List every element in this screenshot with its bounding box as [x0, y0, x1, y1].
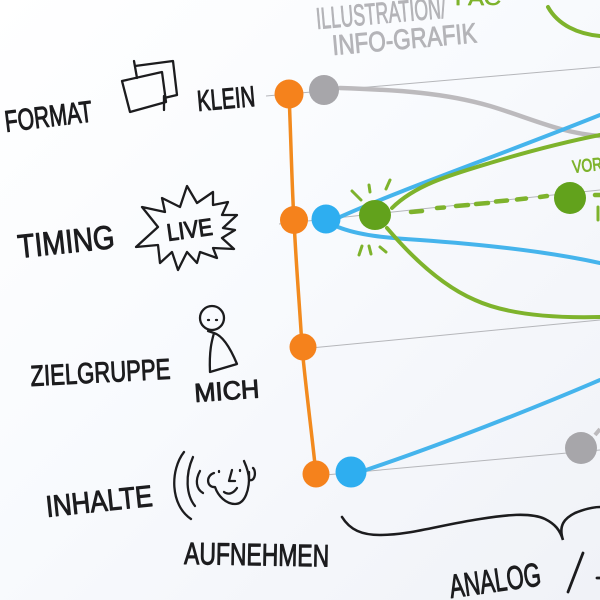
label: Info-Grafik: INFO-GRAFIK — [331, 17, 478, 61]
label: Format: FORMAT — [3, 95, 94, 139]
icon: person — [200, 306, 237, 372]
green connector lines — [387, 7, 600, 317]
icon: speaking face — [174, 452, 255, 519]
label: Zielgruppe: ZIELGRUPPE — [30, 354, 171, 393]
thin pencil guide lines — [266, 67, 600, 477]
analog digital slash — [568, 553, 600, 592]
green dashed line — [411, 195, 600, 212]
label: Mich: MICH — [193, 374, 260, 408]
curly brace — [342, 507, 600, 540]
label: Klein: KLEIN — [196, 81, 256, 118]
grey nodes — [309, 75, 597, 464]
label: Inhalte: INHALTE — [44, 480, 154, 524]
green nodes — [359, 182, 586, 230]
blue nodes — [312, 204, 366, 488]
icon: live burst — [136, 186, 237, 270]
orange nodes — [274, 80, 330, 488]
label: Live: LIVE — [165, 214, 214, 247]
icon: overlapping rectangles — [122, 61, 177, 112]
label: Timing: TIMING — [16, 218, 116, 265]
blue connector lines — [338, 115, 600, 470]
grey stub line — [595, 429, 600, 435]
orange timeline — [289, 94, 316, 474]
icon: green highlight rays — [352, 180, 598, 255]
label: Aufnehmen: AUFNEHMEN — [184, 536, 329, 574]
grey connector line — [340, 88, 600, 136]
